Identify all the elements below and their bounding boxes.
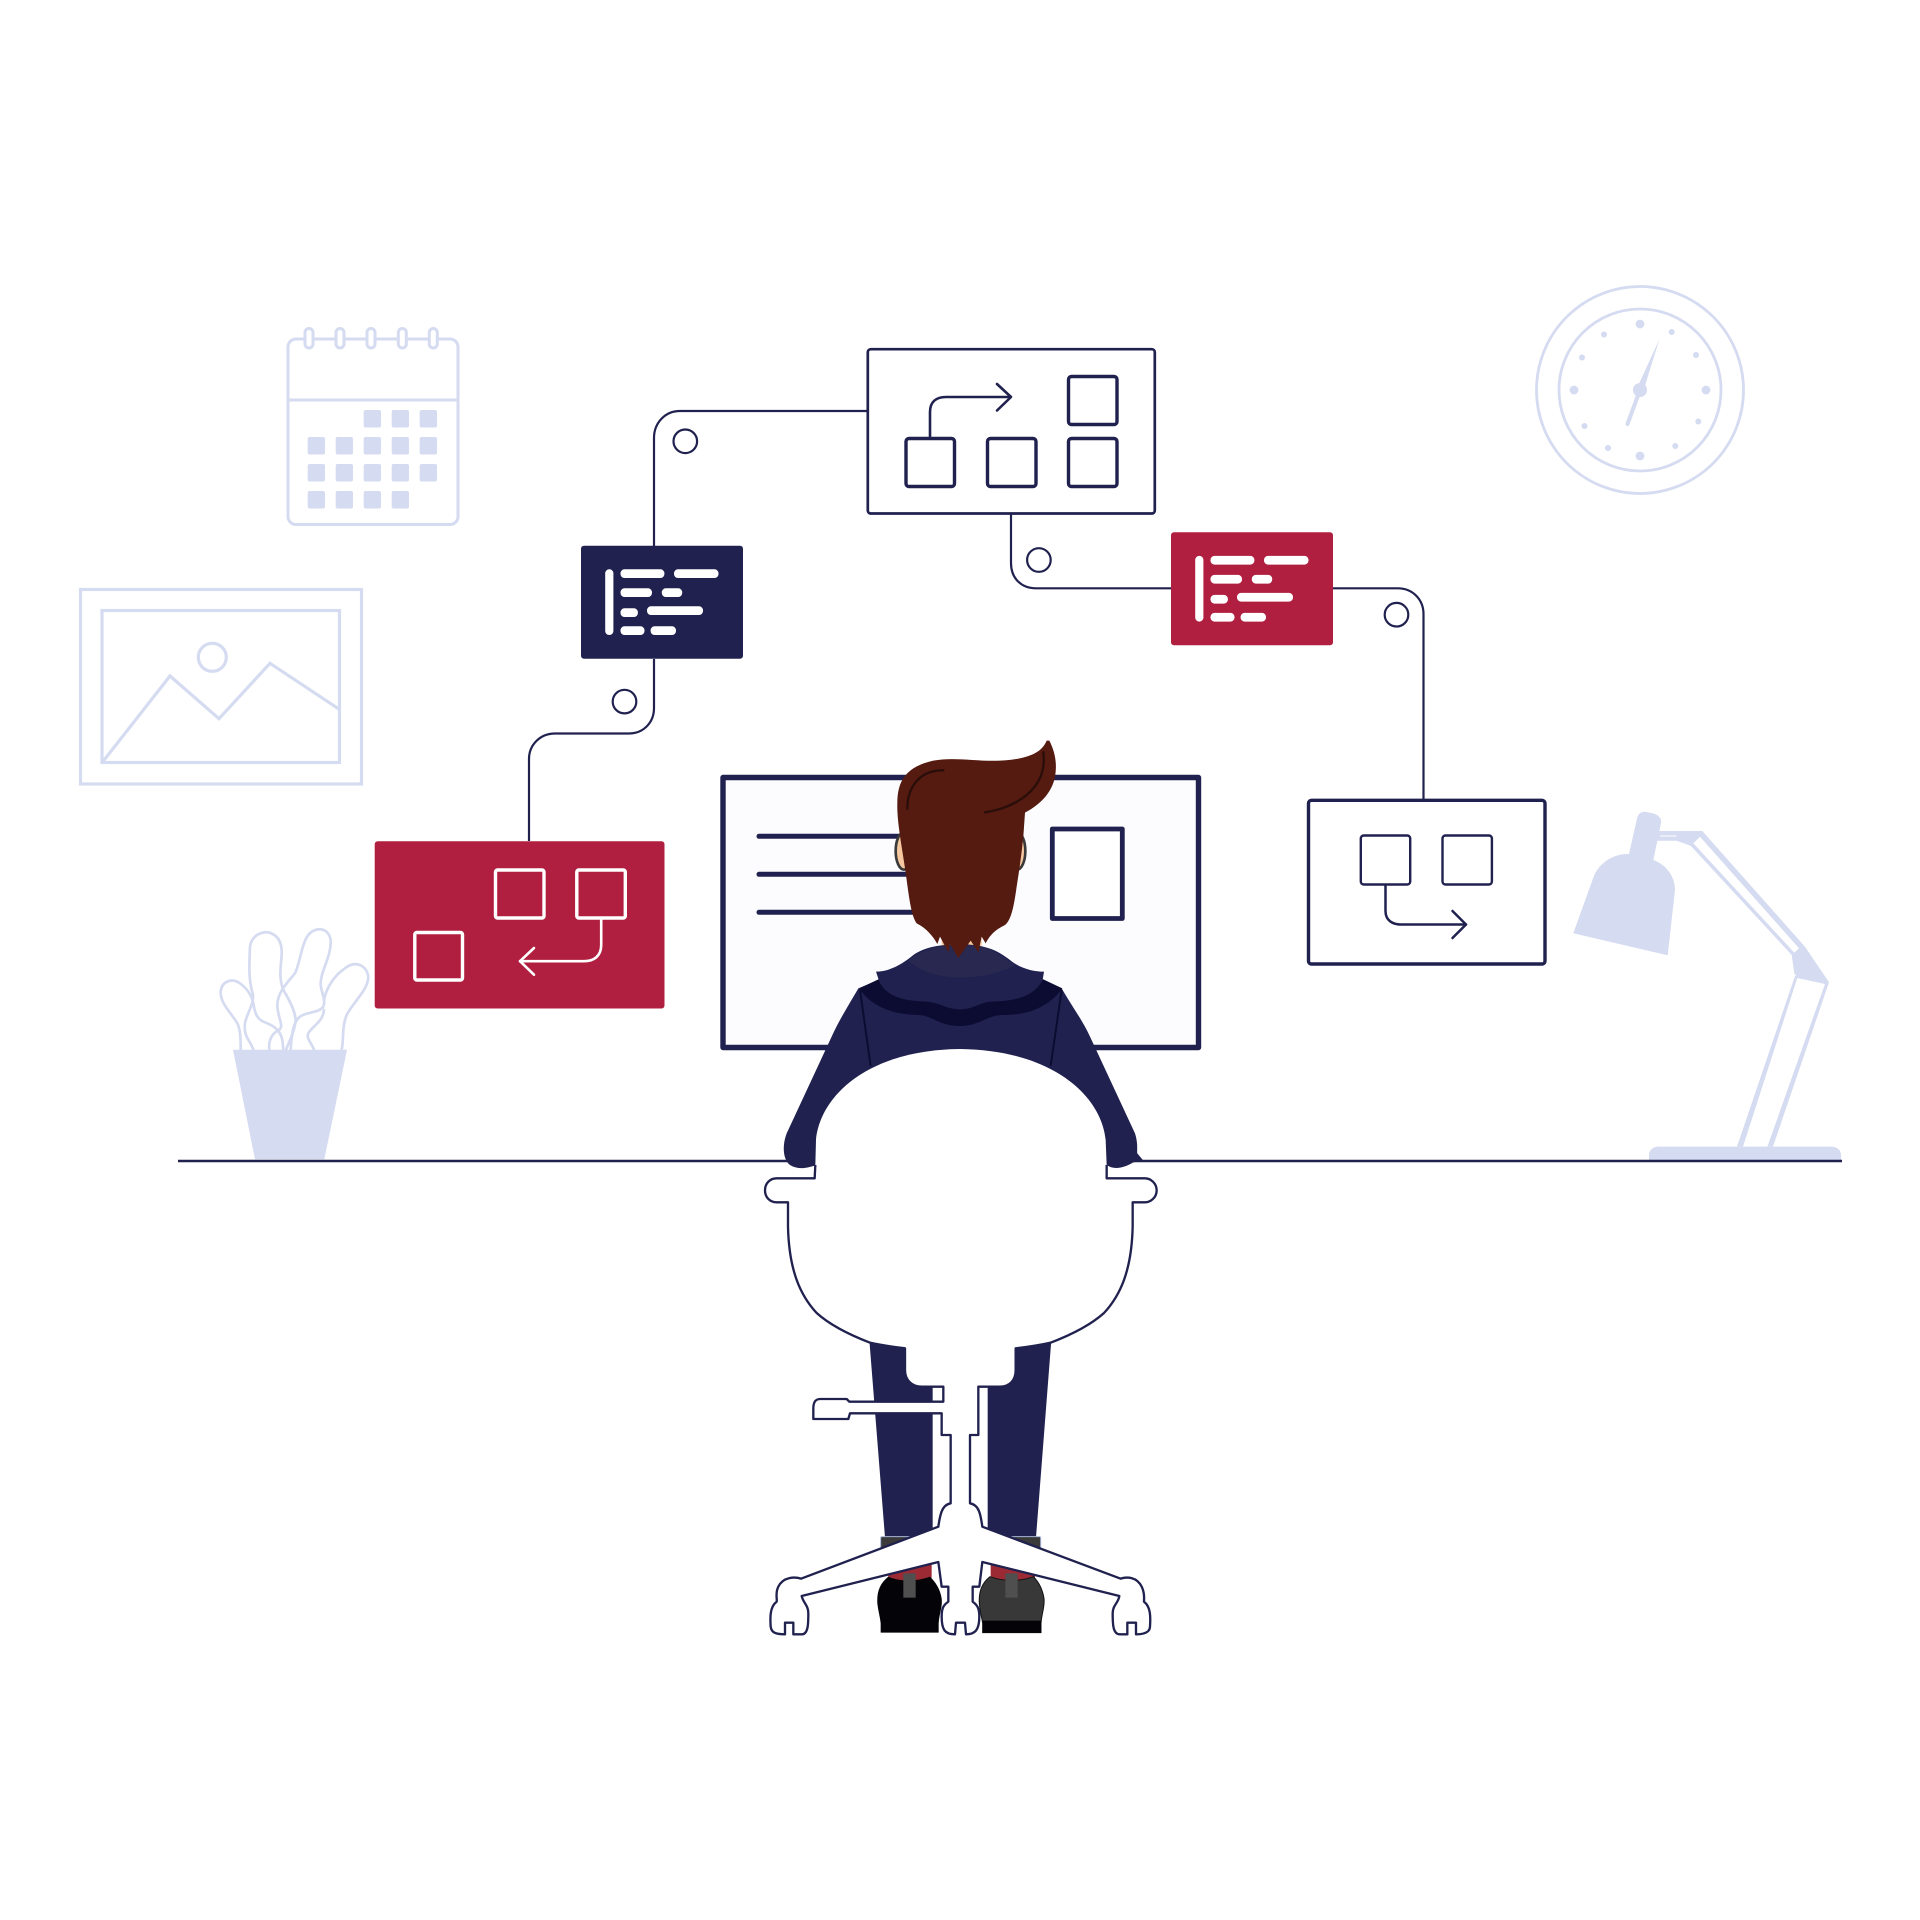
trousers	[869, 1340, 1051, 1537]
chair outline	[765, 1165, 1157, 1634]
monitor	[723, 778, 1198, 1048]
connector lines and nodes	[529, 411, 1424, 841]
office chair	[765, 1049, 1157, 1634]
lamp upper arm	[1657, 831, 1829, 982]
hoodie collar shadow	[859, 979, 1062, 1026]
desk line	[178, 1160, 1842, 1162]
panel: top flow card	[868, 349, 1155, 514]
icon: potted plant	[221, 929, 368, 1159]
right shoe	[979, 1577, 1044, 1633]
hood	[876, 944, 1044, 1009]
hair strands	[907, 752, 1044, 812]
lamp lower arm	[1737, 976, 1829, 1147]
hair	[897, 741, 1056, 958]
sleeve seams	[860, 990, 1062, 1066]
lamp base	[1649, 1147, 1841, 1161]
hoodie body	[784, 980, 1143, 1168]
icon: framed picture	[80, 590, 362, 784]
icon: calendar	[288, 328, 458, 524]
panel: navy code card	[581, 546, 743, 659]
socks	[888, 1562, 1035, 1581]
panel: red code card	[1171, 532, 1333, 645]
lamp shade	[1573, 812, 1675, 955]
icon: desk lamp	[1573, 812, 1841, 1161]
chair fill	[765, 1049, 1157, 1634]
person: legs and shoes behind chair	[869, 1340, 1051, 1633]
neck	[942, 937, 982, 950]
ears	[896, 832, 1025, 870]
panel: red flow card	[375, 841, 664, 1008]
cuffs	[881, 1537, 1041, 1552]
person: upper body	[784, 741, 1143, 1168]
laces	[903, 1573, 1018, 1598]
left shoe	[877, 1577, 942, 1633]
panel: right flow card	[1308, 800, 1545, 964]
icon: wall clock	[1536, 286, 1744, 494]
